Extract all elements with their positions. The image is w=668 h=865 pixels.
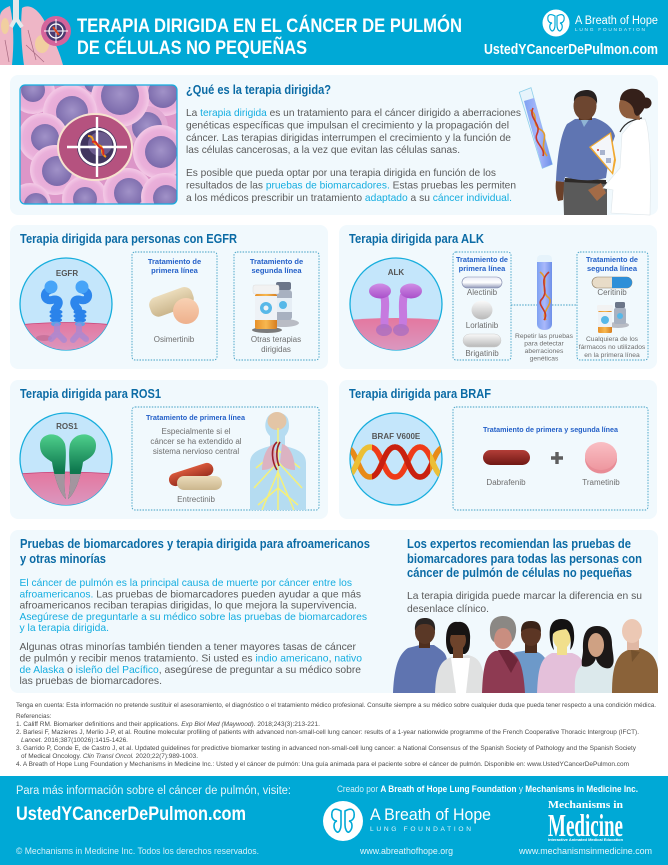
logo: A Breath of Hope: LUNG FOUNDATION bbox=[575, 27, 646, 33]
copyright: © Mechanisms in Medicine Inc. Todos los derechos reservados. bbox=[16, 846, 259, 856]
box: first-line treatment: primera línea bbox=[459, 264, 506, 273]
box: first-line treatment: Tratamiento de bbox=[456, 255, 508, 264]
connector lines bbox=[511, 304, 577, 306]
box: first-line treatment bbox=[132, 252, 217, 360]
box: second-line treatment: Tratamiento de bbox=[586, 255, 638, 264]
text block: definition: cáncer. Las terapias dirigidas interrumpen el crecimiento y la función de bbox=[186, 132, 511, 144]
box: first-line treatment bbox=[132, 407, 319, 510]
panel: what is targeted therapy bbox=[10, 75, 658, 216]
icon: plus bbox=[551, 452, 563, 464]
box: first- and second-line treatment: Trametinib bbox=[582, 478, 620, 487]
illustration: group of diverse people bbox=[393, 616, 658, 693]
icon: Dabrafenib capsule bbox=[483, 450, 530, 465]
text block: clinical outcome bbox=[407, 590, 642, 615]
heading: experts recommend: Los expertos recomiendan las pruebas de bbox=[407, 536, 631, 551]
text block: other minorities: de Alaska o isleño del Pacífico, asegúrese de preguntar a su médico sobre bbox=[20, 664, 361, 676]
text block: biomarker eligibility bbox=[186, 167, 516, 204]
text: repeat testing: genéticas bbox=[530, 356, 559, 362]
heading: African Americans and minorities bbox=[20, 536, 370, 566]
text block: other minorities: Algunas otras minorías también tienden a tener mayores tasas de cáncer bbox=[20, 641, 356, 653]
credit line: Creado por A Breath of Hope Lung Foundation y Mechanisms in Medicine Inc. bbox=[337, 784, 638, 795]
text block: biomarker eligibility: Es posible que pueda optar por una terapia dirigida en función de los bbox=[186, 167, 496, 179]
text block: clinical outcome: La terapia dirigida puede marcar la diferencia en su bbox=[407, 590, 642, 602]
text block: African Americans: Asegúrese de preguntarle a su médico sobre las pruebas de biomarcadores bbox=[20, 611, 367, 623]
logo: A Breath of Hope: LUNG FOUNDATION bbox=[370, 826, 471, 833]
box: second-line treatment: Otras terapias bbox=[251, 335, 301, 344]
box: second-line treatment: dirigidas bbox=[261, 345, 291, 354]
text block: clinical outcome: desenlace clínico. bbox=[407, 603, 489, 615]
box: second-line treatment bbox=[234, 252, 319, 360]
diagram: BRAF V600E DNA bbox=[345, 413, 445, 505]
box: second-line treatment: Tratamiento de bbox=[250, 257, 303, 266]
references: Referencias: bbox=[16, 713, 52, 720]
icon: Trametinib pill bbox=[585, 442, 617, 474]
text block: biomarker eligibility: a los médicos prescribir un tratamiento adaptado a su cáncer individual. bbox=[186, 192, 512, 204]
panel: ALK bbox=[339, 225, 657, 369]
logo: A Breath of Hope: A Breath of Hope bbox=[370, 805, 491, 824]
text block: African Americans: afroamericanos reciban terapias dirigidas, lo que mejora la supervivencia. bbox=[20, 600, 357, 612]
box: second-line treatment: Ceritinib bbox=[597, 288, 627, 297]
diagram: EGFR receptor: EGFR bbox=[56, 269, 78, 278]
box: second-line treatment: segunda línea bbox=[251, 266, 302, 275]
diagram: EGFR receptor bbox=[18, 258, 114, 355]
box: first-line treatment: Entrectinib bbox=[177, 495, 215, 504]
call to action: Para más información sobre el cáncer de pulmón, visite: bbox=[16, 785, 291, 797]
text: central nervous system: cáncer se ha extendido al bbox=[150, 437, 242, 446]
text block: other minorities: las pruebas de biomarcadores. bbox=[20, 675, 162, 687]
footer band bbox=[0, 776, 668, 865]
references: 4. A Breath of Hope Lung Foundation y Mechanisms in Medicine Inc.: Usted y el cáncer de pulmón: Una guía animada para el paciente sobre el cáncer de pulmón. Disponible en: www.UstedYCancerDePulmon.com bbox=[16, 761, 629, 768]
text block: definition: las células cancerosas, a la vez que evitan las células sanas. bbox=[186, 144, 460, 156]
logo: A Breath of Hope bbox=[542, 10, 658, 36]
panel: BRAF bbox=[339, 380, 657, 519]
heading: African Americans and minorities: y otras minorías bbox=[20, 551, 106, 566]
text block: African Americans bbox=[20, 577, 367, 634]
icon: Ceritinib capsule bbox=[592, 277, 632, 288]
text: central nervous system: Especialmente si el bbox=[162, 427, 231, 436]
references: Lancet. 2016;387(10026):1415-1426. bbox=[21, 737, 128, 744]
panel: biomarker testing and expert recommendation bbox=[10, 530, 658, 693]
panel: EGFR bbox=[10, 225, 328, 369]
logo: Mechanisms in Medicine: Mechanisms in bbox=[548, 800, 623, 811]
box: second-line treatment: en la primera línea bbox=[584, 352, 640, 359]
heading: experts recommend bbox=[407, 536, 642, 580]
logo: A Breath of Hope bbox=[323, 801, 491, 841]
box: first- and second-line treatment: Tratamiento de primera y segunda línea bbox=[483, 425, 619, 434]
logo: Mechanisms in Medicine: Interactive Animated Medical Education bbox=[548, 838, 623, 842]
box: first-line treatment: Brigatinib bbox=[465, 349, 499, 358]
box: first-line treatment: Osimertinib bbox=[154, 335, 195, 344]
box: second-line treatment bbox=[577, 252, 648, 360]
text block: African Americans: y la terapia dirigida. bbox=[20, 622, 109, 634]
website url: UstedYCancerDePulmon.com bbox=[16, 804, 246, 825]
logo: Mechanisms in Medicine bbox=[548, 800, 623, 843]
references: of Medical Oncology. Clin Transl Oncol. 2020;22(7):989-1003. bbox=[21, 753, 198, 760]
illustration: man patient bbox=[556, 90, 615, 215]
icon: test tube with DNA bbox=[537, 255, 552, 330]
heading: Terapia dirigida para ROS1 bbox=[20, 386, 161, 401]
text block: African Americans: afroamericanos. Las pruebas de biomarcadores pueden ayudar a que más bbox=[20, 588, 361, 600]
heading: experts recommend: cáncer de pulmón de células no pequeñas bbox=[407, 565, 632, 580]
icon: test tube with DNA bbox=[519, 88, 552, 168]
text block: other minorities bbox=[20, 641, 362, 687]
diagram: ROS1 receptor: ROS1 bbox=[56, 422, 78, 431]
box: second-line treatment: segunda línea bbox=[587, 264, 638, 273]
link: mechanismsinmedicine: www.mechanismsinmedicine.com bbox=[518, 846, 652, 856]
heading: Terapia dirigida para personas con EGFR bbox=[20, 231, 238, 246]
link: abreathofhope: www.abreathofhope.org bbox=[359, 846, 453, 856]
icon: medicine bottles bbox=[252, 282, 299, 333]
diagram: ROS1 receptor bbox=[18, 413, 114, 510]
title bbox=[77, 13, 462, 59]
diagram: ALK receptor: ALK bbox=[388, 268, 404, 277]
diagram: BRAF V600E DNA: BRAF V600E bbox=[372, 432, 421, 441]
heading: African Americans and minorities: Pruebas de biomarcadores y terapia dirigida para afroamericanos bbox=[20, 536, 370, 551]
header band bbox=[0, 0, 668, 65]
box: first-line treatment bbox=[453, 252, 511, 360]
text block: definition: La terapia dirigida es un tratamiento para el cáncer dirigido a aberraciones bbox=[186, 107, 521, 119]
disclaimer: Tenga en cuenta: Esta información no pretende sustituir el asesoramiento, el diagnóstico o el tratamiento médico profesional. Consulte siempre a su médico sobre cualquier duda que pueda tener respecto a una condición médica. bbox=[16, 702, 656, 709]
box: first-line treatment: Lorlatinib bbox=[466, 321, 499, 330]
panel: ROS1 bbox=[10, 380, 328, 519]
box: second-line treatment: fármacos no utilizados bbox=[579, 344, 646, 351]
icon: Alectinib capsule bbox=[462, 277, 502, 288]
box: first- and second-line treatment: Dabrafenib bbox=[486, 478, 526, 487]
references: 1. Califf RM. Biomarker definitions and their applications. Exp Biol Med (Maywood). 2018;243(3):213-221. bbox=[16, 721, 320, 728]
icon: Lorlatinib pill bbox=[472, 300, 492, 320]
icon: Entrectinib capsules bbox=[167, 461, 222, 490]
text block: definition: genéticas específicas que impulsan el crecimiento y la propagación del bbox=[186, 120, 509, 132]
text: central nervous system: sistema nervioso central bbox=[153, 447, 239, 456]
text block: biomarker eligibility: resultados de las pruebas de biomarcadores. Estas pruebas les permiten bbox=[186, 180, 516, 192]
text: repeat testing: para detectar bbox=[524, 340, 564, 348]
title: DE CÉLULAS NO PEQUEÑAS bbox=[77, 36, 307, 59]
title: TERAPIA DIRIGIDA EN EL CÁNCER DE PULMÓN bbox=[77, 13, 462, 37]
references: 2. Barlesi F, Mazieres J, Merlio J-P, et al. Routine molecular profiling of patients with advanced non-small-cell lung cancer: results of a 1-year nationwide programme of the French Cooperative Thoracic Intergroup (IFCT). bbox=[16, 729, 639, 736]
icon: lungs with targeted cell bbox=[0, 0, 71, 65]
heading: Terapia dirigida para BRAF bbox=[349, 386, 491, 401]
text block: definition bbox=[186, 107, 521, 156]
box: first-line treatment: primera línea bbox=[151, 266, 199, 275]
box: first-line treatment: Tratamiento de primera línea bbox=[146, 413, 246, 422]
box: first-line treatment: Alectinib bbox=[467, 288, 498, 297]
heading: ¿Qué es la terapia dirigida? bbox=[186, 82, 331, 97]
box: first-line treatment: Tratamiento de bbox=[148, 257, 201, 266]
box: first- and second-line treatment bbox=[453, 407, 648, 510]
image: targeted cancer cell among cells bbox=[19, 84, 178, 205]
diagram: ALK receptor bbox=[348, 258, 444, 355]
icon: Brigatinib pill bbox=[463, 334, 501, 347]
icon: Osimertinib pills bbox=[147, 285, 199, 324]
text: repeat testing: aberraciones bbox=[525, 348, 564, 355]
text: central nervous system bbox=[150, 427, 242, 456]
icon: medicine bottles bbox=[597, 302, 629, 333]
references bbox=[16, 713, 639, 768]
text: repeat testing bbox=[515, 333, 574, 362]
text block: other minorities: de pulmón y recibir menos tratamiento. Si usted es indio americano, nativo bbox=[20, 652, 362, 664]
illustration: body with lungs and nervous system bbox=[250, 412, 306, 510]
text: repeat testing: Repetir las pruebas bbox=[515, 333, 574, 340]
references: 3. Garrido P, Conde E, de Castro J, et al. Updated guidelines for predictive biomarker testing in advanced non-small-cell lung cancer: a National Consensus of the Spanish Society of Pathology and the Spanish Society bbox=[16, 745, 637, 752]
logo: A Breath of Hope: A Breath of Hope bbox=[575, 15, 658, 27]
heading: Terapia dirigida para ALK bbox=[349, 231, 485, 246]
box: second-line treatment: Cualquiera de los bbox=[586, 336, 639, 343]
text block: African Americans: El cáncer de pulmón es la principal causa de muerte por cáncer entre los bbox=[20, 577, 352, 589]
illustration: doctor with clipboard bbox=[589, 89, 652, 215]
